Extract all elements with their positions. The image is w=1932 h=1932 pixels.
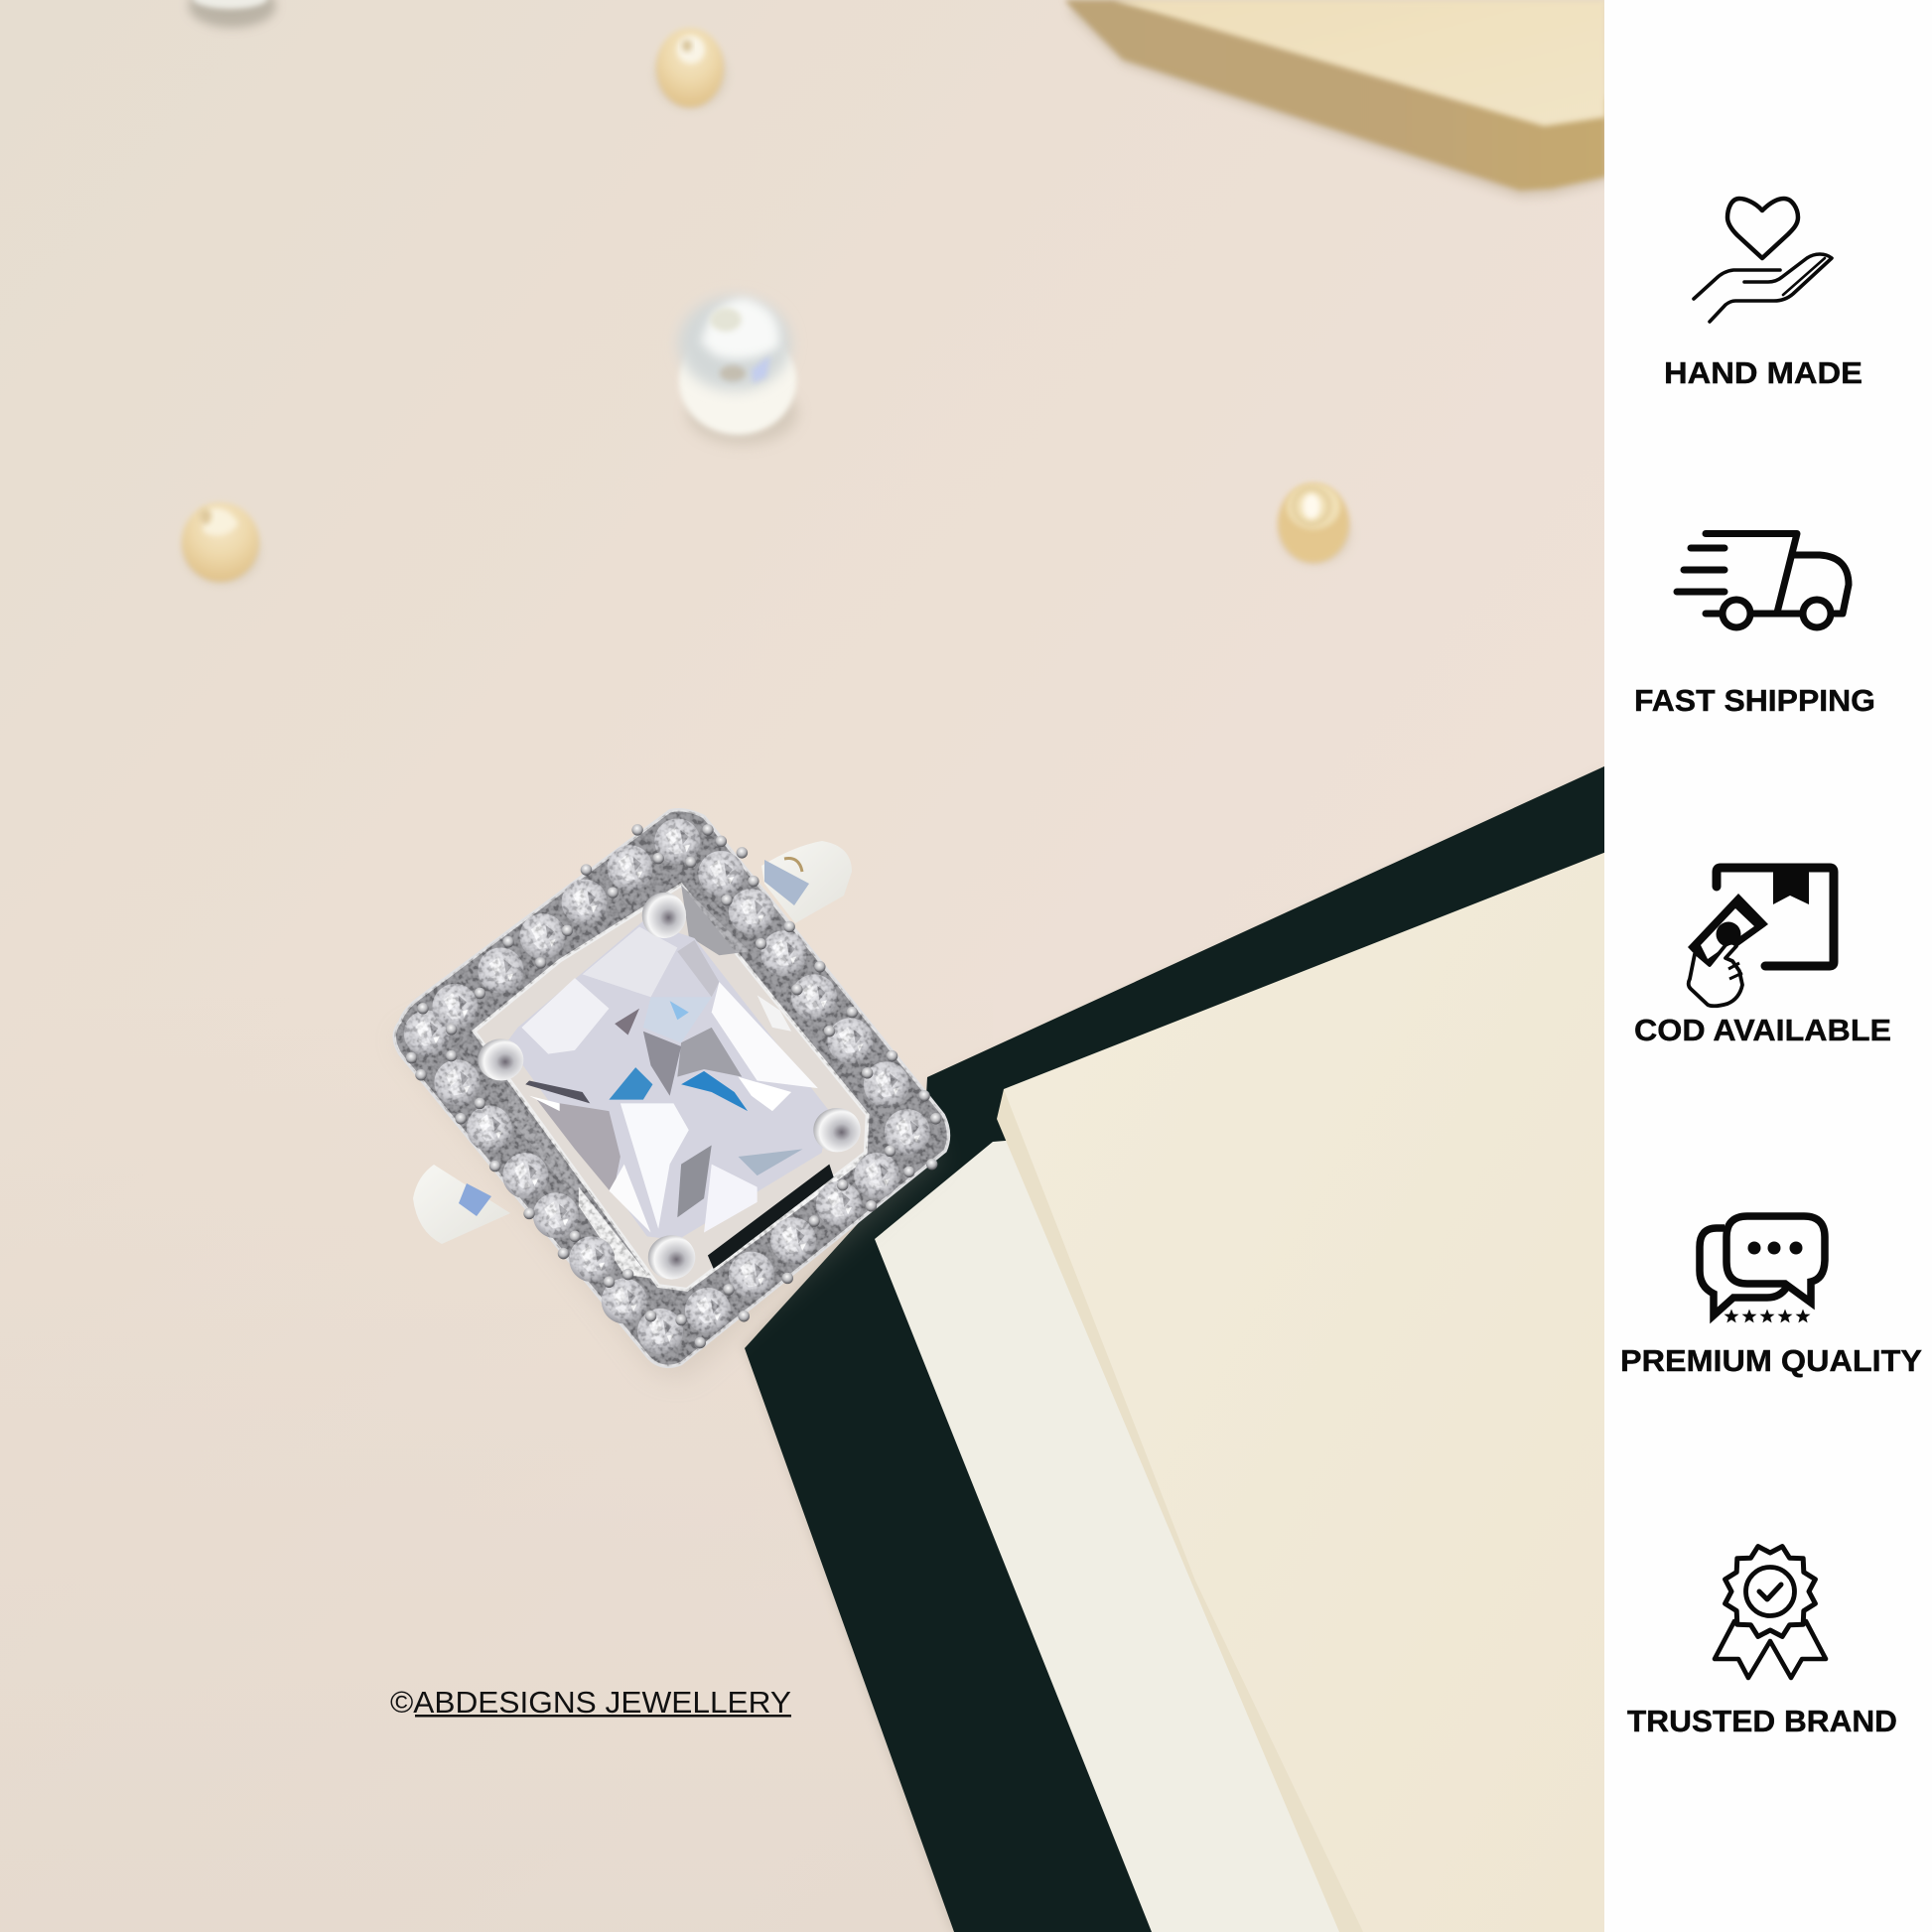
pearl, partly cropped at top left (189, 0, 276, 28)
copyright caption: ©ABDESIGNS JEWELLERY (390, 1685, 791, 1720)
label: cod available: COD AVAILABLE (1634, 1013, 1891, 1047)
ring band, lower left (413, 1165, 510, 1244)
ivory top sheet (1004, 852, 1606, 1932)
icon: trust badge rosette (1715, 1547, 1826, 1678)
gold bead, right (1278, 483, 1351, 564)
label: trusted brand: TRUSTED BRAND (1627, 1704, 1897, 1738)
under sheet (997, 1089, 1606, 1932)
label: premium quality: PREMIUM QUALITY (1620, 1343, 1922, 1378)
large pearl, centre (678, 296, 798, 445)
white card sheet (875, 1092, 1606, 1932)
halo frame (394, 810, 948, 1366)
centre gemstone (506, 921, 829, 1240)
opening in halo (475, 885, 868, 1290)
label: hand made: HAND MADE (1664, 355, 1863, 390)
pave beads (406, 824, 941, 1348)
icon: heart in hand (1694, 199, 1832, 322)
ring shadow (396, 894, 943, 1378)
label: fast shipping: FAST SHIPPING (1634, 683, 1875, 718)
panel: white feature column (1604, 0, 1932, 1932)
ring (394, 810, 948, 1378)
pave stones (404, 818, 930, 1354)
pave sparkle texture (394, 810, 948, 1366)
icon: fast delivery truck (1677, 534, 1849, 627)
icon: cash on delivery (1688, 866, 1834, 1006)
black card with paper sheets, lower right (743, 765, 1606, 1932)
gold bead, top (655, 28, 727, 109)
gold bead, left (182, 502, 260, 584)
icon: review chat bubbles with stars (1700, 1216, 1825, 1322)
ring band, upper right (761, 841, 852, 923)
prongs (478, 893, 861, 1280)
wooden block, top right (1064, 0, 1606, 199)
